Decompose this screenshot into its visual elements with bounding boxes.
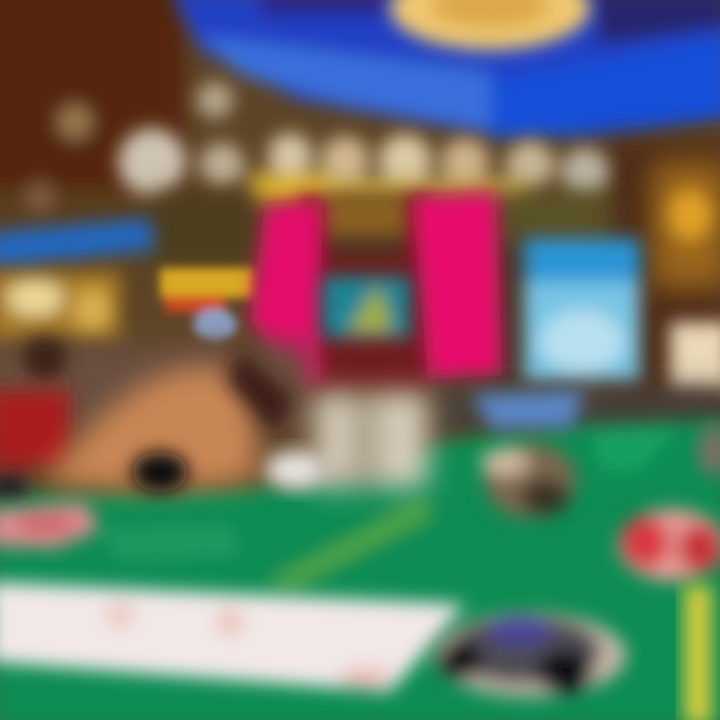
left yellow lights [0, 272, 120, 342]
blue ceiling band [170, 0, 720, 138]
blue chair [472, 390, 585, 430]
white cylinder [314, 392, 428, 488]
yellow stem [684, 585, 712, 720]
pink cards at left [0, 502, 100, 548]
right blue screen [524, 238, 640, 384]
left blue banner [0, 218, 155, 268]
dark hair and shadow [132, 350, 295, 492]
right brown wall with lamp [605, 140, 720, 410]
white cloth [265, 450, 325, 490]
row of cream lights [118, 82, 609, 206]
middle backdrop [150, 195, 610, 390]
ceiling light [390, 0, 590, 50]
right edge object [698, 424, 720, 476]
white betting sheet [0, 582, 465, 692]
red flower [618, 509, 720, 581]
chip stack [481, 442, 576, 518]
pink curtain left [250, 200, 322, 385]
green table [0, 420, 720, 720]
centre dark red panel [300, 195, 430, 395]
tan arm and body [40, 366, 258, 489]
pink curtain right [412, 192, 502, 380]
mid floor band [0, 345, 720, 435]
left rainbow sign [160, 268, 255, 341]
centre screen [322, 276, 410, 338]
dark brown upper-left wall [0, 0, 250, 230]
dark chips on sheet [434, 613, 626, 697]
red figure on left [0, 336, 70, 498]
lamp and cream panel [668, 189, 720, 392]
